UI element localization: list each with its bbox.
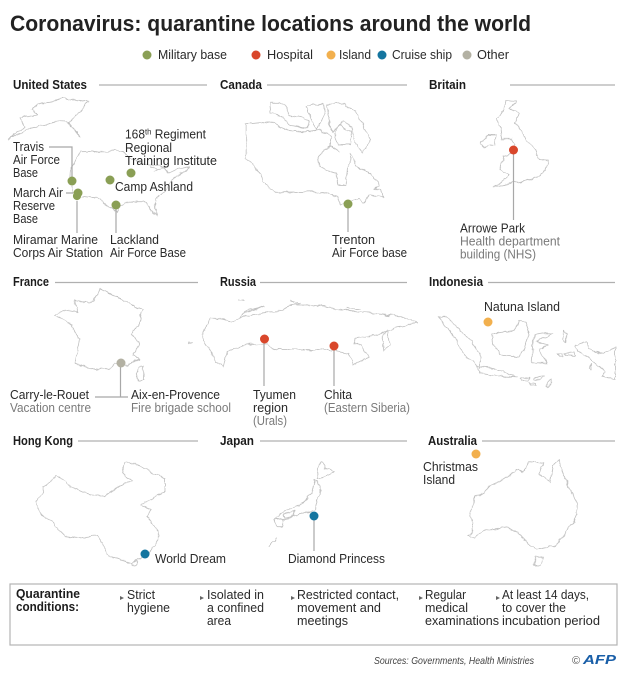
condition: isolated: Isolated in (207, 588, 264, 602)
marker: 168th Regiment (126, 168, 136, 178)
label: Trenton: Trenton (332, 233, 375, 247)
marker: Christmas Island (472, 450, 480, 458)
label: March: March Air (13, 186, 63, 200)
AFP credit: AFP (582, 652, 616, 667)
label: 168th Regiment: 168 (125, 128, 146, 142)
box heading: Quarantine (16, 587, 80, 601)
label: Arrowe Park (460, 222, 561, 262)
condition: 14 days: At least 14 days, (502, 588, 589, 602)
panel: Japan (220, 434, 407, 566)
legend: Other (477, 48, 509, 62)
condition: restricted contact: movement and (297, 601, 381, 615)
label: Travis (13, 140, 60, 180)
label: Natuna Island: Natuna Island (484, 300, 560, 314)
map: France (55, 288, 144, 382)
condition: medical examinations (419, 588, 499, 628)
leader line (313, 516, 315, 551)
marker: March (74, 188, 82, 198)
map: Australia (467, 460, 577, 565)
panel: Hong Kong (13, 434, 226, 566)
legend: Island (339, 48, 371, 62)
label: Arrowe Park: Health department (460, 234, 561, 248)
leader lines (95, 365, 128, 397)
label: Trenton (332, 233, 407, 260)
panel: quarantine conditions (10, 584, 617, 645)
label: Arrowe Park: Arrowe Park (460, 222, 526, 236)
heading: Canada: Canada (220, 78, 263, 92)
condition: medical examinations: examinations (425, 614, 499, 628)
marker: Lackland (112, 200, 120, 210)
label: Christmas Island (423, 460, 478, 487)
marker: Aix and Carry (116, 358, 126, 368)
label: March (13, 186, 63, 226)
label: Tyumen: region (253, 401, 288, 415)
heading: Japan: Japan (220, 434, 254, 448)
label: Carry-le-Rouet: Carry-le-Rouet (10, 388, 90, 402)
marker: Miramar (72, 192, 82, 200)
condition: medical examinations: Regular (425, 588, 466, 602)
label: Chita (324, 388, 410, 415)
marker: World Dream (140, 550, 150, 558)
heading: United States: United States (13, 78, 87, 92)
label: Lackland: Air Force Base (110, 246, 186, 260)
sources: Sources: Governments, Health Ministries (374, 655, 535, 667)
marker: Tyumen (260, 334, 269, 344)
label: Miramar: Miramar Marine (13, 233, 98, 247)
condition: isolated (200, 588, 264, 628)
heading: Australia: Australia (428, 434, 478, 448)
label: March: Base (13, 212, 38, 226)
panel: Canada (220, 78, 407, 260)
label: March: Reserve (13, 199, 55, 213)
label: Travis: Travis (13, 140, 44, 154)
heading: Britain: Britain (429, 78, 466, 92)
label: 168th Regiment (125, 128, 217, 168)
condition: hygiene (120, 588, 170, 615)
condition: 14 days (496, 588, 600, 628)
map: United States (9, 98, 190, 216)
label: Tyumen: (Urals) (253, 414, 287, 428)
label: Carry-le-Rouet: Vacation centre (10, 401, 91, 415)
marker: Chita (330, 342, 338, 350)
label: Chita: (Eastern Siberia) (324, 401, 410, 415)
marker: Natuna Island (484, 318, 492, 326)
legend: Hospital (267, 48, 313, 62)
condition: 14 days: incubation period (502, 614, 600, 628)
map: Canada (246, 103, 383, 205)
label: World Dream: World Dream (155, 552, 226, 566)
map: Britain (480, 100, 548, 187)
legend: Cruise ship (392, 48, 452, 62)
label: 168th Regiment: th (145, 128, 151, 136)
condition: restricted contact: Restricted contact, (297, 588, 399, 602)
AFP credit: © (572, 655, 580, 667)
leader lines (264, 339, 334, 386)
label: Christmas Island: Christmas (423, 460, 478, 474)
label: Travis: Base (13, 166, 38, 180)
label: Travis: Air Force (13, 153, 60, 167)
condition: restricted contact (291, 588, 399, 628)
heading: Hong Kong: Hong Kong (13, 434, 73, 448)
label: Lackland: Lackland (110, 233, 159, 247)
label: Arrowe Park: building (NHS) (460, 248, 536, 262)
marker: Travis (68, 176, 76, 186)
heading: Russia: Russia (220, 275, 257, 289)
map: China (35, 463, 165, 566)
legend (142, 48, 509, 62)
label: Aix-en-Provence (131, 388, 231, 415)
condition: 14 days: to cover the (502, 601, 566, 615)
label: Christmas Island: Island (423, 473, 455, 487)
label: 168th Regiment: Regional (125, 141, 172, 155)
label: Carry-le-Rouet (10, 388, 91, 415)
box heading: conditions: (16, 600, 79, 614)
condition: isolated: a confined (207, 601, 264, 615)
leader line (512, 150, 514, 220)
label: Lackland (110, 233, 186, 260)
label: Camp Ashland: Camp Ashland (115, 180, 193, 194)
label: Miramar: Corps Air Station (13, 246, 103, 260)
legend: Military base (158, 48, 227, 62)
label: 168th Regiment: Regiment (151, 128, 206, 142)
condition: isolated: area (207, 614, 231, 628)
condition: hygiene: hygiene (127, 601, 170, 615)
marker: Trenton (344, 200, 352, 208)
label: Miramar (13, 233, 103, 260)
label: Aix-en-Provence: Aix-en-Provence (131, 388, 220, 402)
panel: France (10, 275, 231, 415)
leader lines (49, 147, 116, 233)
condition: medical examinations: medical (425, 601, 468, 615)
panel: United States (9, 78, 217, 260)
heading: Indonesia: Indonesia (429, 275, 484, 289)
label: Chita: Chita (324, 388, 352, 402)
panel: Britain (429, 78, 615, 262)
label: Diamond Princess: Diamond Princess (288, 552, 385, 566)
label: 168th Regiment: Training Institute (125, 154, 217, 168)
marker: Diamond Princess (310, 512, 318, 520)
title: Coronavirus: quarantine locations around the world (10, 11, 531, 36)
label: Aix-en-Provence: Fire brigade school (131, 401, 231, 415)
panel: Australia (423, 434, 615, 565)
condition: hygiene: Strict (127, 588, 156, 602)
panel: Russia (189, 275, 417, 428)
marker: Camp Ashland (106, 176, 114, 184)
heading: France: France (13, 275, 49, 289)
map: Indonesia (438, 317, 615, 387)
label: Tyumen (253, 388, 296, 428)
map: Japan (268, 462, 334, 547)
condition: restricted contact: meetings (297, 614, 348, 628)
leader line (347, 208, 349, 232)
panel: Indonesia (429, 275, 615, 387)
label: Trenton: Air Force base (332, 246, 407, 260)
marker: Arrowe Park (509, 146, 518, 154)
AFP credit (572, 652, 616, 667)
label: Tyumen: Tyumen (253, 388, 296, 402)
map: Russia (189, 301, 417, 367)
box heading (16, 587, 80, 614)
